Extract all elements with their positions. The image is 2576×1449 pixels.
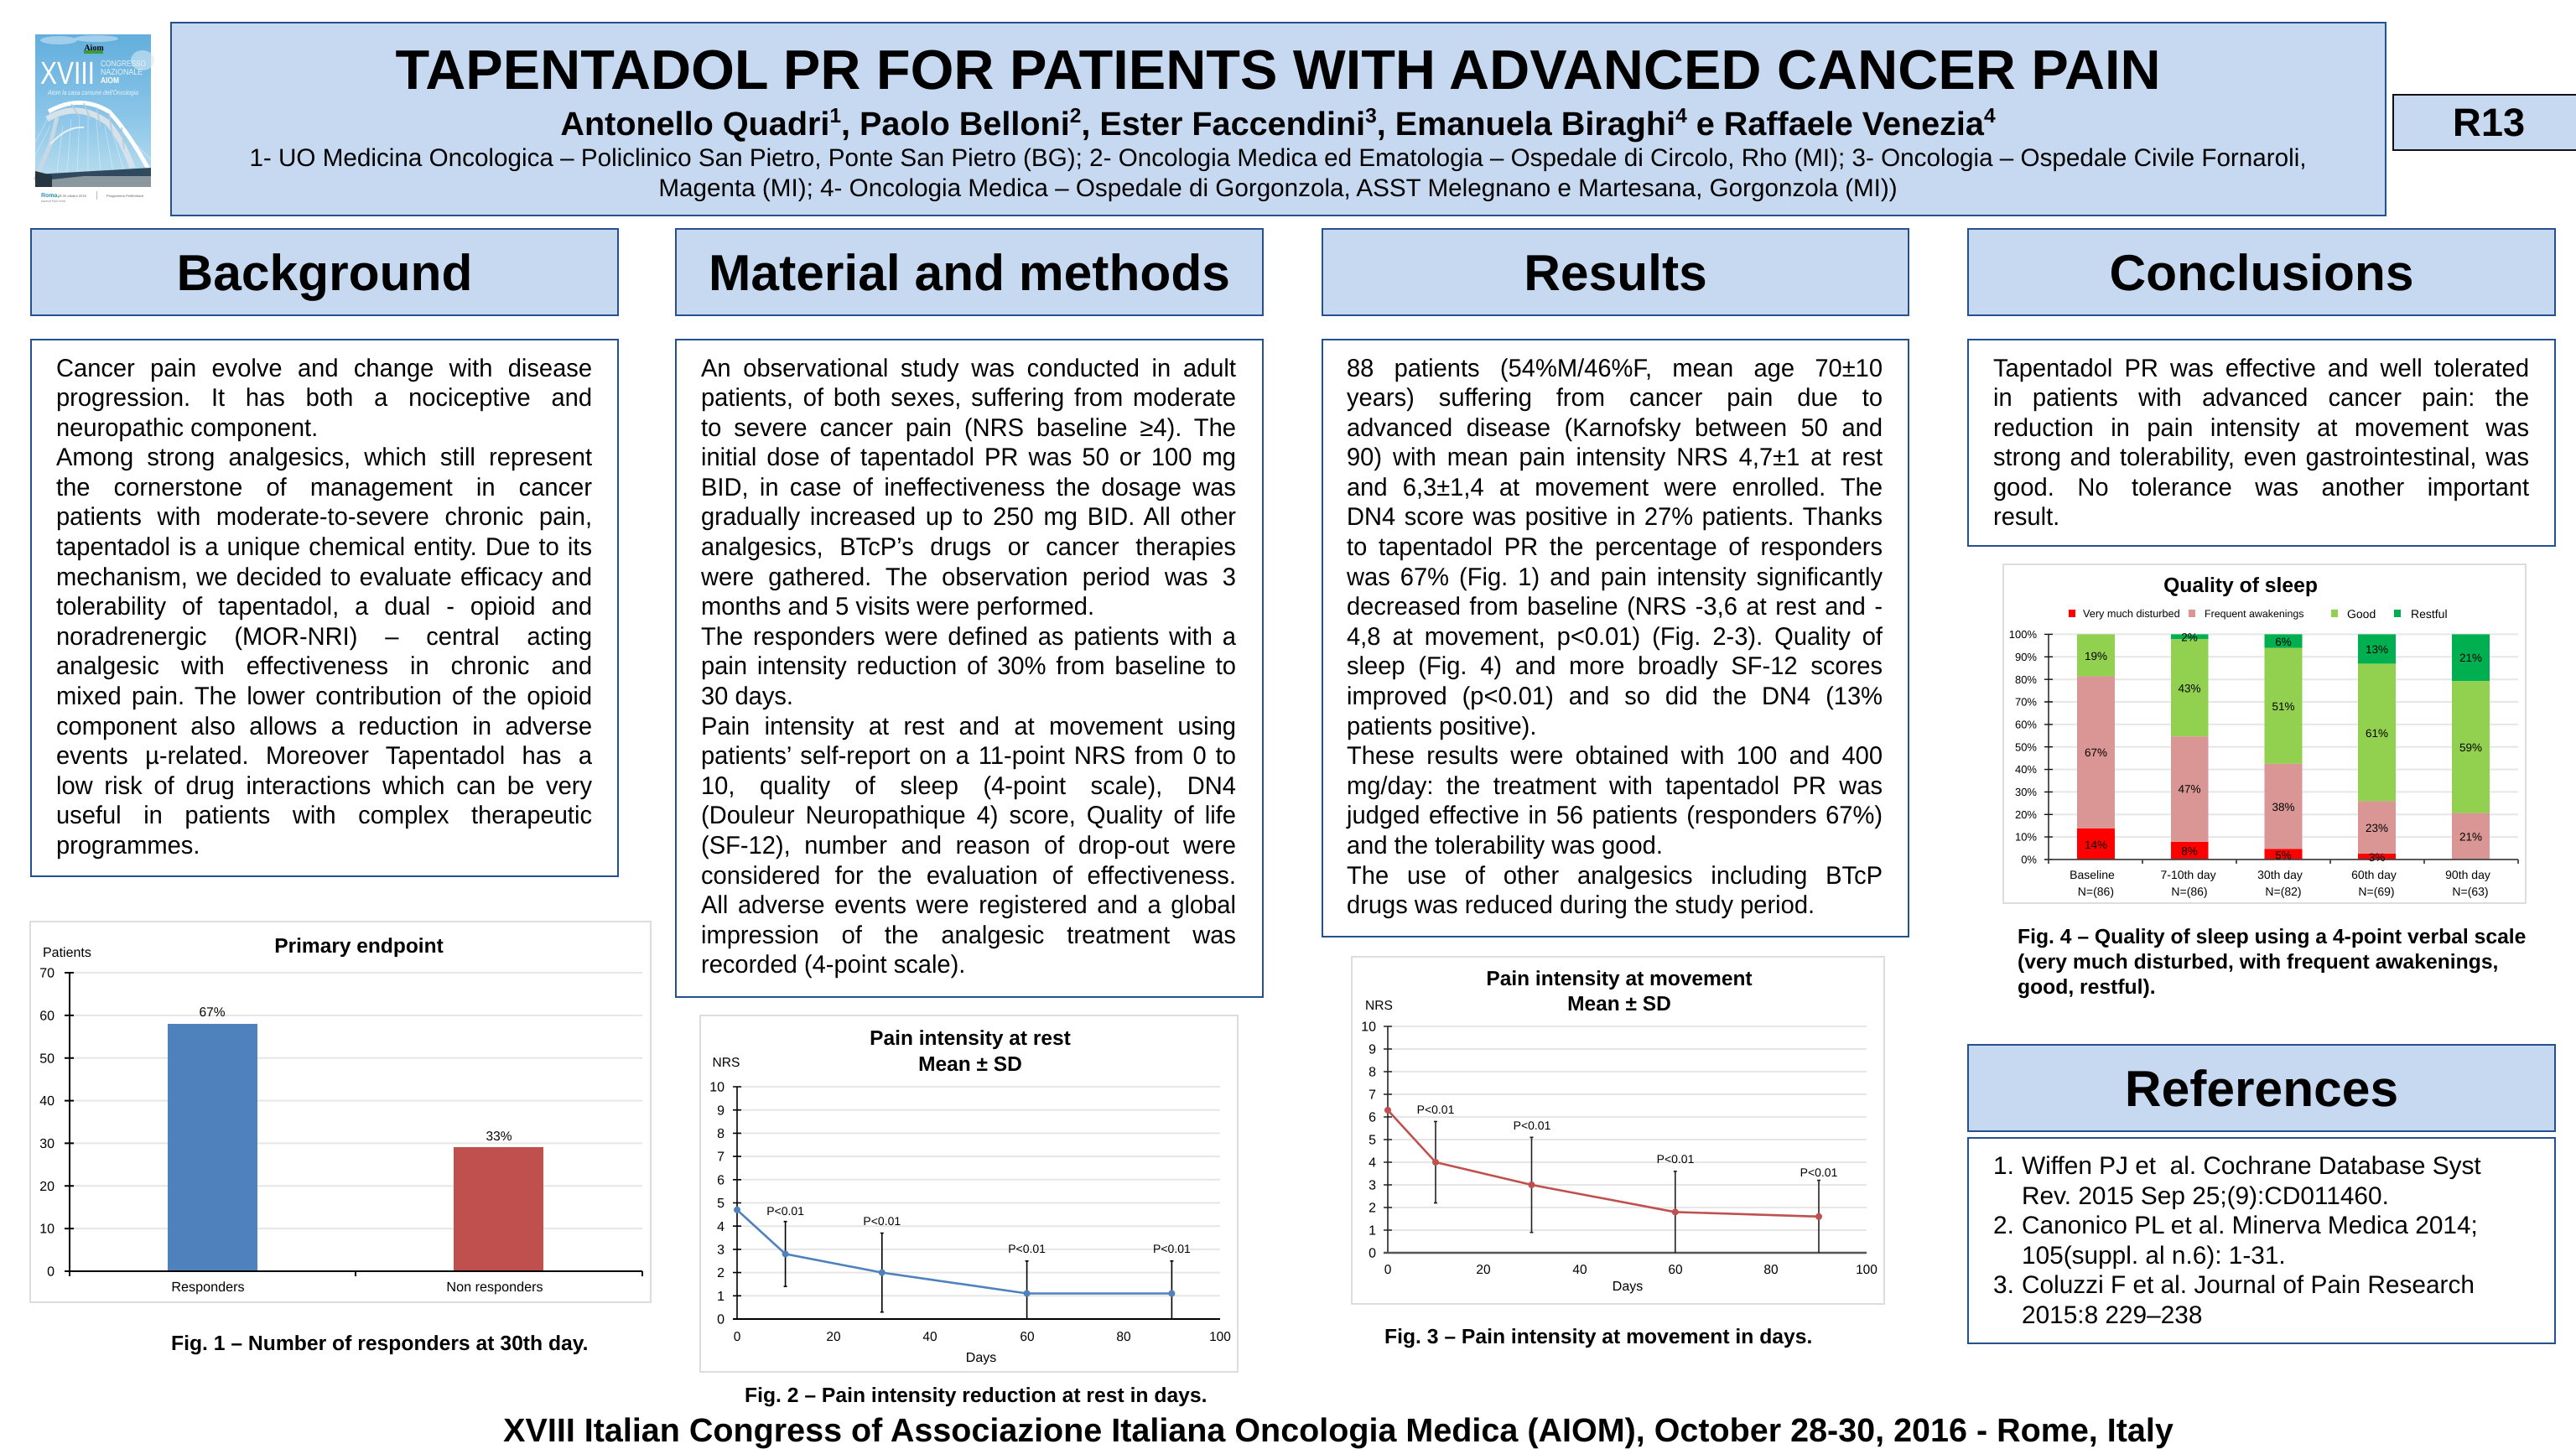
methods body text: were gathered. The observation period was 3 <box>701 564 1236 591</box>
heading: Conclusions: Conclusions <box>2109 244 2414 301</box>
chart: quality of sleep stacked bar chart: N=(82) <box>2265 885 2302 898</box>
chart: quality of sleep stacked bar chart: N=(63) <box>2452 885 2489 898</box>
congress cover image: Marriott Park Hotel <box>41 200 65 203</box>
chart: quality of sleep stacked bar chart: 13% <box>2366 643 2388 656</box>
methods body text: The responders were defined as patients with a <box>701 623 1236 651</box>
background body text: component also allows a reduction in adverse <box>56 713 592 740</box>
chart: primary endpoint bar chart: Responders <box>171 1280 245 1295</box>
results body text: 88 patients (54%M/46%F, mean age 70±10 <box>1347 354 1883 382</box>
background body text: mixed pain. The lower contribution of the opioid <box>56 683 592 710</box>
results body text <box>1346 354 1883 919</box>
chart: pain intensity at rest line chart: 4 <box>717 1220 724 1234</box>
chart: quality of sleep stacked bar chart: 7-10th day <box>2161 868 2216 881</box>
results body text: sleep (Fig. 4) and more broadly SF-12 scores <box>1347 652 1883 680</box>
background body text: low risk of drug interactions which can be very <box>56 772 592 800</box>
chart: pain intensity at rest line chart: 40 <box>922 1330 937 1344</box>
congress cover image: Roma, <box>41 193 59 199</box>
results body text: mg/day: the treatment with tapentadol PR was <box>1347 772 1883 800</box>
methods body text: All adverse events were registered and a global <box>701 891 1236 919</box>
congress cover image: 28-30 ottobre 2016 <box>58 194 87 198</box>
chart: pain intensity at movement line chart: 0 <box>1368 1247 1376 1261</box>
poster code R13 <box>2392 94 2576 151</box>
chart: primary endpoint bar chart: 20 <box>39 1180 55 1194</box>
chart: pain intensity at movement line chart: 9 <box>1368 1043 1376 1057</box>
panel: references list <box>1967 1137 2556 1344</box>
conclusions body text: reduction in pain intensity at movement was <box>1993 414 2529 442</box>
legend <box>2069 607 2448 621</box>
references text: 2. <box>1993 1212 2014 1239</box>
line series: movement <box>1384 1107 1822 1220</box>
chart: pain intensity at movement line chart: 0 <box>1384 1263 1392 1277</box>
methods body text: 10, quality of sleep (4-point scale), DN4 <box>701 772 1236 800</box>
methods body text: impression of the analgesic treatment was <box>701 922 1236 949</box>
chart: quality of sleep stacked bar chart: 47% <box>2178 783 2201 796</box>
background body text: progression. It has both a nociceptive and <box>56 384 592 412</box>
chart: primary endpoint bar chart: 50 <box>39 1052 55 1066</box>
results body text: advanced disease (Karnofsky between 50 and <box>1347 414 1883 442</box>
chart: pain intensity at movement line chart: 20 <box>1476 1263 1491 1277</box>
chart: pain intensity at movement line chart: 4 <box>1368 1156 1376 1171</box>
poster title: TAPENTADOL PR FOR PATIENTS WITH ADVANCED CANCER PAIN <box>395 39 2161 101</box>
methods body text: months and 5 visits were performed. <box>701 593 1094 621</box>
chart: pain intensity at rest line chart: Days <box>966 1351 996 1365</box>
legend: Very much disturbed <box>2083 608 2180 620</box>
authors: Antonello Quadri1, Paolo Belloni2, Ester Faccendini3, Emanuela Biraghi4 e Raffaele Venezia4 <box>560 105 1996 143</box>
chart: pain intensity at movement line chart: 2 <box>1368 1202 1376 1216</box>
chart: quality of sleep stacked bar chart: 59% <box>2459 741 2482 754</box>
background body text: programmes. <box>56 832 200 860</box>
heading: Results: Results <box>1524 244 1707 301</box>
results body text: These results were obtained with 100 and 400 <box>1347 742 1883 770</box>
heading: Results <box>1322 228 1909 316</box>
poster code R13: R13 <box>2453 100 2525 144</box>
chart: pain intensity at movement line chart: 3 <box>1368 1179 1376 1193</box>
methods body text: analgesics, BTcP’s drugs or cancer therapies <box>701 533 1236 561</box>
methods body text: to severe cancer pain (NRS baseline ≥4). The <box>701 414 1236 442</box>
background body text: Cancer pain evolve and change with disease <box>56 354 592 382</box>
chart: quality of sleep stacked bar chart: 38% <box>2272 801 2295 813</box>
results body text: decreased from baseline (NRS -3,6 at rest and - <box>1347 593 1883 621</box>
chart: quality of sleep stacked bar chart: Baseline <box>2070 868 2115 881</box>
chart: quality of sleep stacked bar chart: 80% <box>2015 673 2037 686</box>
bar: non responders <box>454 1147 543 1271</box>
chart: pain intensity at rest line chart: P<0.01 <box>766 1204 804 1218</box>
methods body text: pain intensity reduction of 30% from baseline to <box>701 652 1236 680</box>
chart: quality of sleep stacked bar chart: 70% <box>2015 696 2037 709</box>
references text: Coluzzi F et al. Journal of Pain Research <box>2022 1271 2475 1299</box>
chart: pain intensity at movement line chart: P<0.01 <box>1800 1166 1838 1179</box>
bar: responders <box>168 1024 257 1271</box>
chart: pain intensity at movement line chart: P<0.01 <box>1417 1103 1455 1116</box>
chart: quality of sleep stacked bar chart: N=(69) <box>2358 885 2395 898</box>
chart: pain intensity at movement line chart: 100 <box>1856 1263 1877 1277</box>
chart: primary endpoint bar chart: 30 <box>39 1137 55 1151</box>
chart: pain intensity at rest line chart: 3 <box>717 1243 724 1258</box>
line series: rest <box>734 1207 1175 1296</box>
congress cover image: Aiom <box>84 44 104 53</box>
chart: pain intensity at rest line chart: 6 <box>717 1173 724 1187</box>
background body text: noradrenergic (MOR-NRI) – central acting <box>56 623 592 651</box>
chart: pain intensity at movement line chart: 80 <box>1763 1263 1779 1277</box>
bar: 60th day <box>2358 634 2396 860</box>
chart: primary endpoint bar chart: 70 <box>39 967 55 981</box>
chart: pain intensity at rest line chart: 1 <box>717 1290 724 1304</box>
results body text: and the tolerability was good. <box>1347 832 1663 860</box>
chart: pain intensity at rest line chart: 8 <box>717 1127 724 1141</box>
conclusions body text: Tapentadol PR was effective and well tolerated <box>1993 354 2529 382</box>
background body text: Among strong analgesics, which still represent <box>56 444 592 471</box>
background body text: mechanism, we decided to evaluate efficacy and <box>56 564 592 591</box>
chart: pain intensity at rest line chart: P<0.01 <box>863 1214 901 1228</box>
chart: quality of sleep stacked bar chart: 60% <box>2015 718 2037 731</box>
caption: figure 3: Fig. 3 – Pain intensity at movement in days. <box>1384 1326 1812 1348</box>
methods body text: considered for the evaluation of effectiveness. <box>701 862 1236 890</box>
congress cover image: AIOM <box>101 76 119 86</box>
chart: quality of sleep stacked bar chart: 10% <box>2015 831 2037 844</box>
chart: quality of sleep stacked bar chart: 61% <box>2366 727 2388 740</box>
background body text <box>56 354 592 860</box>
results body text: The use of other analgesics including BTcP <box>1347 862 1883 890</box>
chart: pain intensity at rest line chart: 0 <box>717 1313 724 1327</box>
results body text: improved (p<0.01) and so did the DN4 (13% <box>1347 683 1883 710</box>
methods body text: gradually increased up to 250 mg BID. All other <box>701 503 1236 531</box>
legend: Frequent awakenings <box>2205 608 2303 620</box>
caption: figure 4: good, restful). <box>2018 976 2156 999</box>
results body text: DN4 score was positive in 27% patients. Thanks <box>1347 503 1883 531</box>
chart: quality of sleep stacked bar chart: 21% <box>2459 652 2482 664</box>
chart: quality of sleep stacked bar chart: 21% <box>2459 831 2482 844</box>
caption: figure 4: (very much disturbed, with frequent awakenings, <box>2018 951 2498 974</box>
panel: background text <box>30 339 619 877</box>
chart: primary endpoint bar chart: 10 <box>39 1223 55 1237</box>
chart: pain intensity at rest line chart: 9 <box>717 1104 724 1118</box>
chart: quality of sleep stacked bar chart: 40% <box>2015 763 2037 776</box>
chart: primary endpoint bar chart: 33% <box>486 1130 512 1144</box>
caption: figure 4 <box>2018 926 2526 999</box>
heading: Background: Background <box>177 244 472 301</box>
bar: 7-10th day <box>2171 634 2209 860</box>
congress cover image <box>34 34 154 203</box>
caption: figure 2: Fig. 2 – Pain intensity reduction at rest in days. <box>745 1384 1208 1407</box>
chart: primary endpoint bar chart: 0 <box>47 1265 55 1280</box>
methods body text: recorded (4-point scale). <box>701 951 965 979</box>
chart: primary endpoint bar chart <box>29 921 652 1303</box>
references text <box>1993 1152 2481 1329</box>
results body text: 4,8 at movement, p<0.01) (Fig. 2-3). Quality of <box>1347 623 1883 651</box>
chart: quality of sleep stacked bar chart: N=(86) <box>2078 885 2114 898</box>
chart: quality of sleep stacked bar chart: 51% <box>2272 700 2295 713</box>
background body text: tapentadol is a unique chemical entity. Due to its <box>56 533 592 561</box>
methods body text: Pain intensity at rest and at movement using <box>701 713 1236 740</box>
caption: figure 4: Fig. 4 – Quality of sleep using a 4-point verbal scale <box>2018 926 2526 948</box>
references text: Canonico PL et al. Minerva Medica 2014; <box>2022 1212 2478 1239</box>
methods body text: initial dose of tapentadol PR was 50 or 100 mg <box>701 444 1236 471</box>
congress cover image: NAZIONALE <box>101 68 143 77</box>
chart: quality of sleep stacked bar chart: 2% <box>2181 631 2198 644</box>
heading: Material and methods <box>675 228 1264 316</box>
background body text: patients with moderate-to-severe chronic pain, <box>56 503 592 531</box>
conclusions body text: good. No tolerance was another important <box>1993 474 2529 501</box>
heading: Background <box>30 228 619 316</box>
methods body text: 30 days. <box>701 683 793 710</box>
references text: 1. <box>1993 1152 2014 1180</box>
methods body text: An observational study was conducted in adult <box>701 354 1236 382</box>
congress cover image: CONGRESSO <box>101 60 146 69</box>
results body text: years) suffering from cancer pain due to <box>1347 384 1883 412</box>
references text: 3. <box>1993 1271 2014 1299</box>
results body text: drugs was reduced during the study period. <box>1347 891 1815 919</box>
chart: quality of sleep stacked bar chart: Quality of sleep <box>2163 574 2318 597</box>
chart: pain intensity at rest line chart: 20 <box>826 1330 841 1344</box>
congress cover image: XVIII <box>40 56 95 91</box>
chart: pain intensity at rest line chart: 100 <box>1209 1330 1231 1344</box>
chart: pain intensity at movement line chart: P<0.01 <box>1514 1119 1551 1132</box>
chart: pain intensity at movement line chart: Days <box>1613 1280 1643 1294</box>
congress cover image: Programma Preliminare <box>106 194 144 198</box>
chart: pain intensity at rest line chart: NRS <box>713 1056 740 1070</box>
chart: pain intensity at movement line chart: P<0.01 <box>1657 1152 1695 1166</box>
chart: quality of sleep stacked bar chart: 67% <box>2085 746 2107 759</box>
chart: quality of sleep stacked bar chart: N=(86) <box>2171 885 2208 898</box>
legend: Restful <box>2411 607 2448 621</box>
chart: pain intensity at movement line chart: NRS <box>1365 999 1393 1013</box>
results body text: judged effective in 56 patients (responders 67%) <box>1347 802 1883 829</box>
chart: pain intensity at rest line chart: Mean ± SD <box>918 1053 1022 1076</box>
methods body text: BID, in case of ineffectiveness the dosage was <box>701 474 1236 501</box>
chart: quality of sleep stacked bar chart <box>2002 564 2527 904</box>
results body text: was 67% (Fig. 1) and pain intensity significantly <box>1347 564 1883 591</box>
chart: pain intensity at rest line chart: Pain intensity at rest <box>870 1027 1071 1050</box>
panel: results text <box>1322 339 1909 937</box>
chart: quality of sleep stacked bar chart: 8% <box>2181 845 2198 858</box>
chart: pain intensity at rest line chart: 2 <box>717 1266 724 1280</box>
bar: 90th day <box>2452 634 2490 860</box>
chart: primary endpoint bar chart: 60 <box>39 1010 55 1023</box>
chart: primary endpoint bar chart: Non responders <box>446 1280 543 1295</box>
title banner <box>170 22 2386 216</box>
chart: primary endpoint bar chart: 40 <box>39 1094 55 1109</box>
conclusions body text <box>1993 354 2529 531</box>
chart: quality of sleep stacked bar chart: 50% <box>2015 740 2037 753</box>
chart: quality of sleep stacked bar chart: 20% <box>2015 808 2037 821</box>
chart: quality of sleep stacked bar chart: 0% <box>2021 854 2037 866</box>
chart: quality of sleep stacked bar chart: 90th day <box>2445 868 2490 881</box>
bar: baseline <box>2077 634 2115 860</box>
results body text: patients positive). <box>1347 713 1536 740</box>
chart: pain intensity at movement line chart: 10 <box>1361 1021 1376 1035</box>
background body text: the cornerstone of management in cancer <box>56 474 592 501</box>
references text: 105(suppl. al n.6): 1-31. <box>2022 1242 2286 1270</box>
chart: primary endpoint bar chart: Primary endpoint <box>274 935 444 958</box>
chart: quality of sleep stacked bar chart: 19% <box>2085 650 2107 662</box>
background body text: neuropathic component. <box>56 414 318 442</box>
chart: pain intensity at rest line chart: P<0.01 <box>1153 1242 1191 1255</box>
chart: primary endpoint bar chart: 67% <box>199 1005 226 1020</box>
chart: quality of sleep stacked bar chart: 14% <box>2085 839 2107 851</box>
results body text: to tapentadol PR the percentage of responders <box>1347 533 1883 561</box>
heading: Conclusions <box>1967 228 2556 316</box>
methods body text <box>701 354 1236 979</box>
references text: Rev. 2015 Sep 25;(9):CD011460. <box>2022 1182 2389 1210</box>
conclusions body text: result. <box>1993 503 2059 531</box>
heading: References <box>1967 1044 2556 1132</box>
conclusions body text: strong and tolerability, even gastrointestinal, was <box>1993 444 2529 471</box>
legend: Good <box>2347 607 2376 621</box>
heading: Material and methods: Material and methods <box>709 244 1230 301</box>
background body text: analgesic with effectiveness in chronic and <box>56 652 592 680</box>
affiliations: Magenta (MI); 4- Oncologia Medica – Ospedale di Gorgonzola, ASST Melegnano e Martesana, Gorgonzola (MI)) <box>658 174 1898 202</box>
chart: pain intensity at rest line chart: 80 <box>1116 1330 1131 1344</box>
chart: pain intensity at movement line chart: Pain intensity at movement <box>1486 968 1753 990</box>
results body text: and 6,3±1,4 at movement were enrolled. The <box>1347 474 1883 501</box>
chart: pain intensity at rest line chart: P<0.01 <box>1008 1242 1046 1255</box>
chart: pain intensity at movement line chart: 7 <box>1368 1088 1376 1103</box>
panel: methods text <box>675 339 1264 998</box>
chart: quality of sleep stacked bar chart: 23% <box>2366 822 2388 834</box>
chart: quality of sleep stacked bar chart: 30th day <box>2257 868 2303 881</box>
chart: pain intensity at movement line chart <box>1351 956 1885 1305</box>
methods body text: (Douleur Neuropathique 4) score, Quality of life <box>701 802 1236 829</box>
chart: pain intensity at movement line chart: 1 <box>1368 1224 1376 1239</box>
bar: 30th day <box>2264 634 2303 860</box>
chart: pain intensity at movement line chart: 40 <box>1572 1263 1587 1277</box>
chart: quality of sleep stacked bar chart: 100% <box>2009 628 2037 641</box>
chart: pain intensity at rest line chart: 5 <box>717 1197 724 1211</box>
background body text: tolerability of tapentadol, a dual - opioid and <box>56 593 592 621</box>
panel: conclusions text <box>1967 339 2556 547</box>
chart: quality of sleep stacked bar chart: 6% <box>2275 636 2292 648</box>
chart: pain intensity at rest line chart: 7 <box>717 1150 724 1165</box>
footer: congress line: XVIII Italian Congress of Associazione Italiana Oncologia Medica (AIOM), October 28-30, 2016 - Rome, Italy <box>503 1412 2174 1449</box>
chart: quality of sleep stacked bar chart: 5% <box>2275 849 2292 861</box>
congress cover image: Aiom la casa comune dell'Oncologia <box>47 89 138 96</box>
chart: pain intensity at movement line chart: 60 <box>1668 1263 1683 1277</box>
methods body text: patients’ self-report on a 11-point NRS from 0 to <box>701 742 1236 770</box>
conclusions body text: in patients with advanced cancer pain: the <box>1993 384 2529 412</box>
background body text: useful in patients with complex therapeutic <box>56 802 592 829</box>
chart: pain intensity at movement line chart: 6 <box>1368 1111 1376 1125</box>
chart: quality of sleep stacked bar chart: 30% <box>2015 786 2037 798</box>
chart: pain intensity at rest line chart: 10 <box>709 1081 724 1095</box>
references text: Wiffen PJ et al. Cochrane Database Syst <box>2022 1152 2481 1180</box>
chart: pain intensity at rest line chart: 60 <box>1020 1330 1035 1344</box>
chart: quality of sleep stacked bar chart: 3% <box>2369 851 2385 864</box>
chart: pain intensity at rest line chart: 0 <box>734 1330 741 1344</box>
chart: quality of sleep stacked bar chart: 90% <box>2015 651 2037 663</box>
background body text: events µ-related. Moreover Tapentadol has a <box>56 742 592 770</box>
chart: primary endpoint bar chart: Patients <box>43 946 91 960</box>
affiliations <box>249 144 2307 202</box>
results body text: 90) with mean pain intensity NRS 4,7±1 at rest <box>1347 444 1883 471</box>
chart: quality of sleep stacked bar chart: 43% <box>2178 683 2201 695</box>
methods body text: (SF-12), number and reason of drop-out were <box>701 832 1236 860</box>
chart: pain intensity at movement line chart: Mean ± SD <box>1567 993 1671 1015</box>
references text: 2015:8 229–238 <box>2022 1301 2202 1329</box>
caption: figure 1: Fig. 1 – Number of responders at 30th day. <box>171 1332 589 1355</box>
chart: pain intensity at movement line chart: 8 <box>1368 1066 1376 1080</box>
methods body text: patients, of both sexes, suffering from moderate <box>701 384 1236 412</box>
affiliations: 1- UO Medicina Oncologica – Policlinico San Pietro, Ponte San Pietro (BG); 2- Oncologia Medica ed Ematologia – Ospedale di Circolo, Rho (MI); 3- Oncologia – Ospedale Civile Fornaroli, <box>249 144 2307 172</box>
chart: pain intensity at rest line chart <box>699 1015 1239 1373</box>
heading: References: References <box>2125 1060 2398 1117</box>
chart: quality of sleep stacked bar chart: 60th day <box>2351 868 2397 881</box>
chart: pain intensity at movement line chart: 5 <box>1368 1134 1376 1148</box>
